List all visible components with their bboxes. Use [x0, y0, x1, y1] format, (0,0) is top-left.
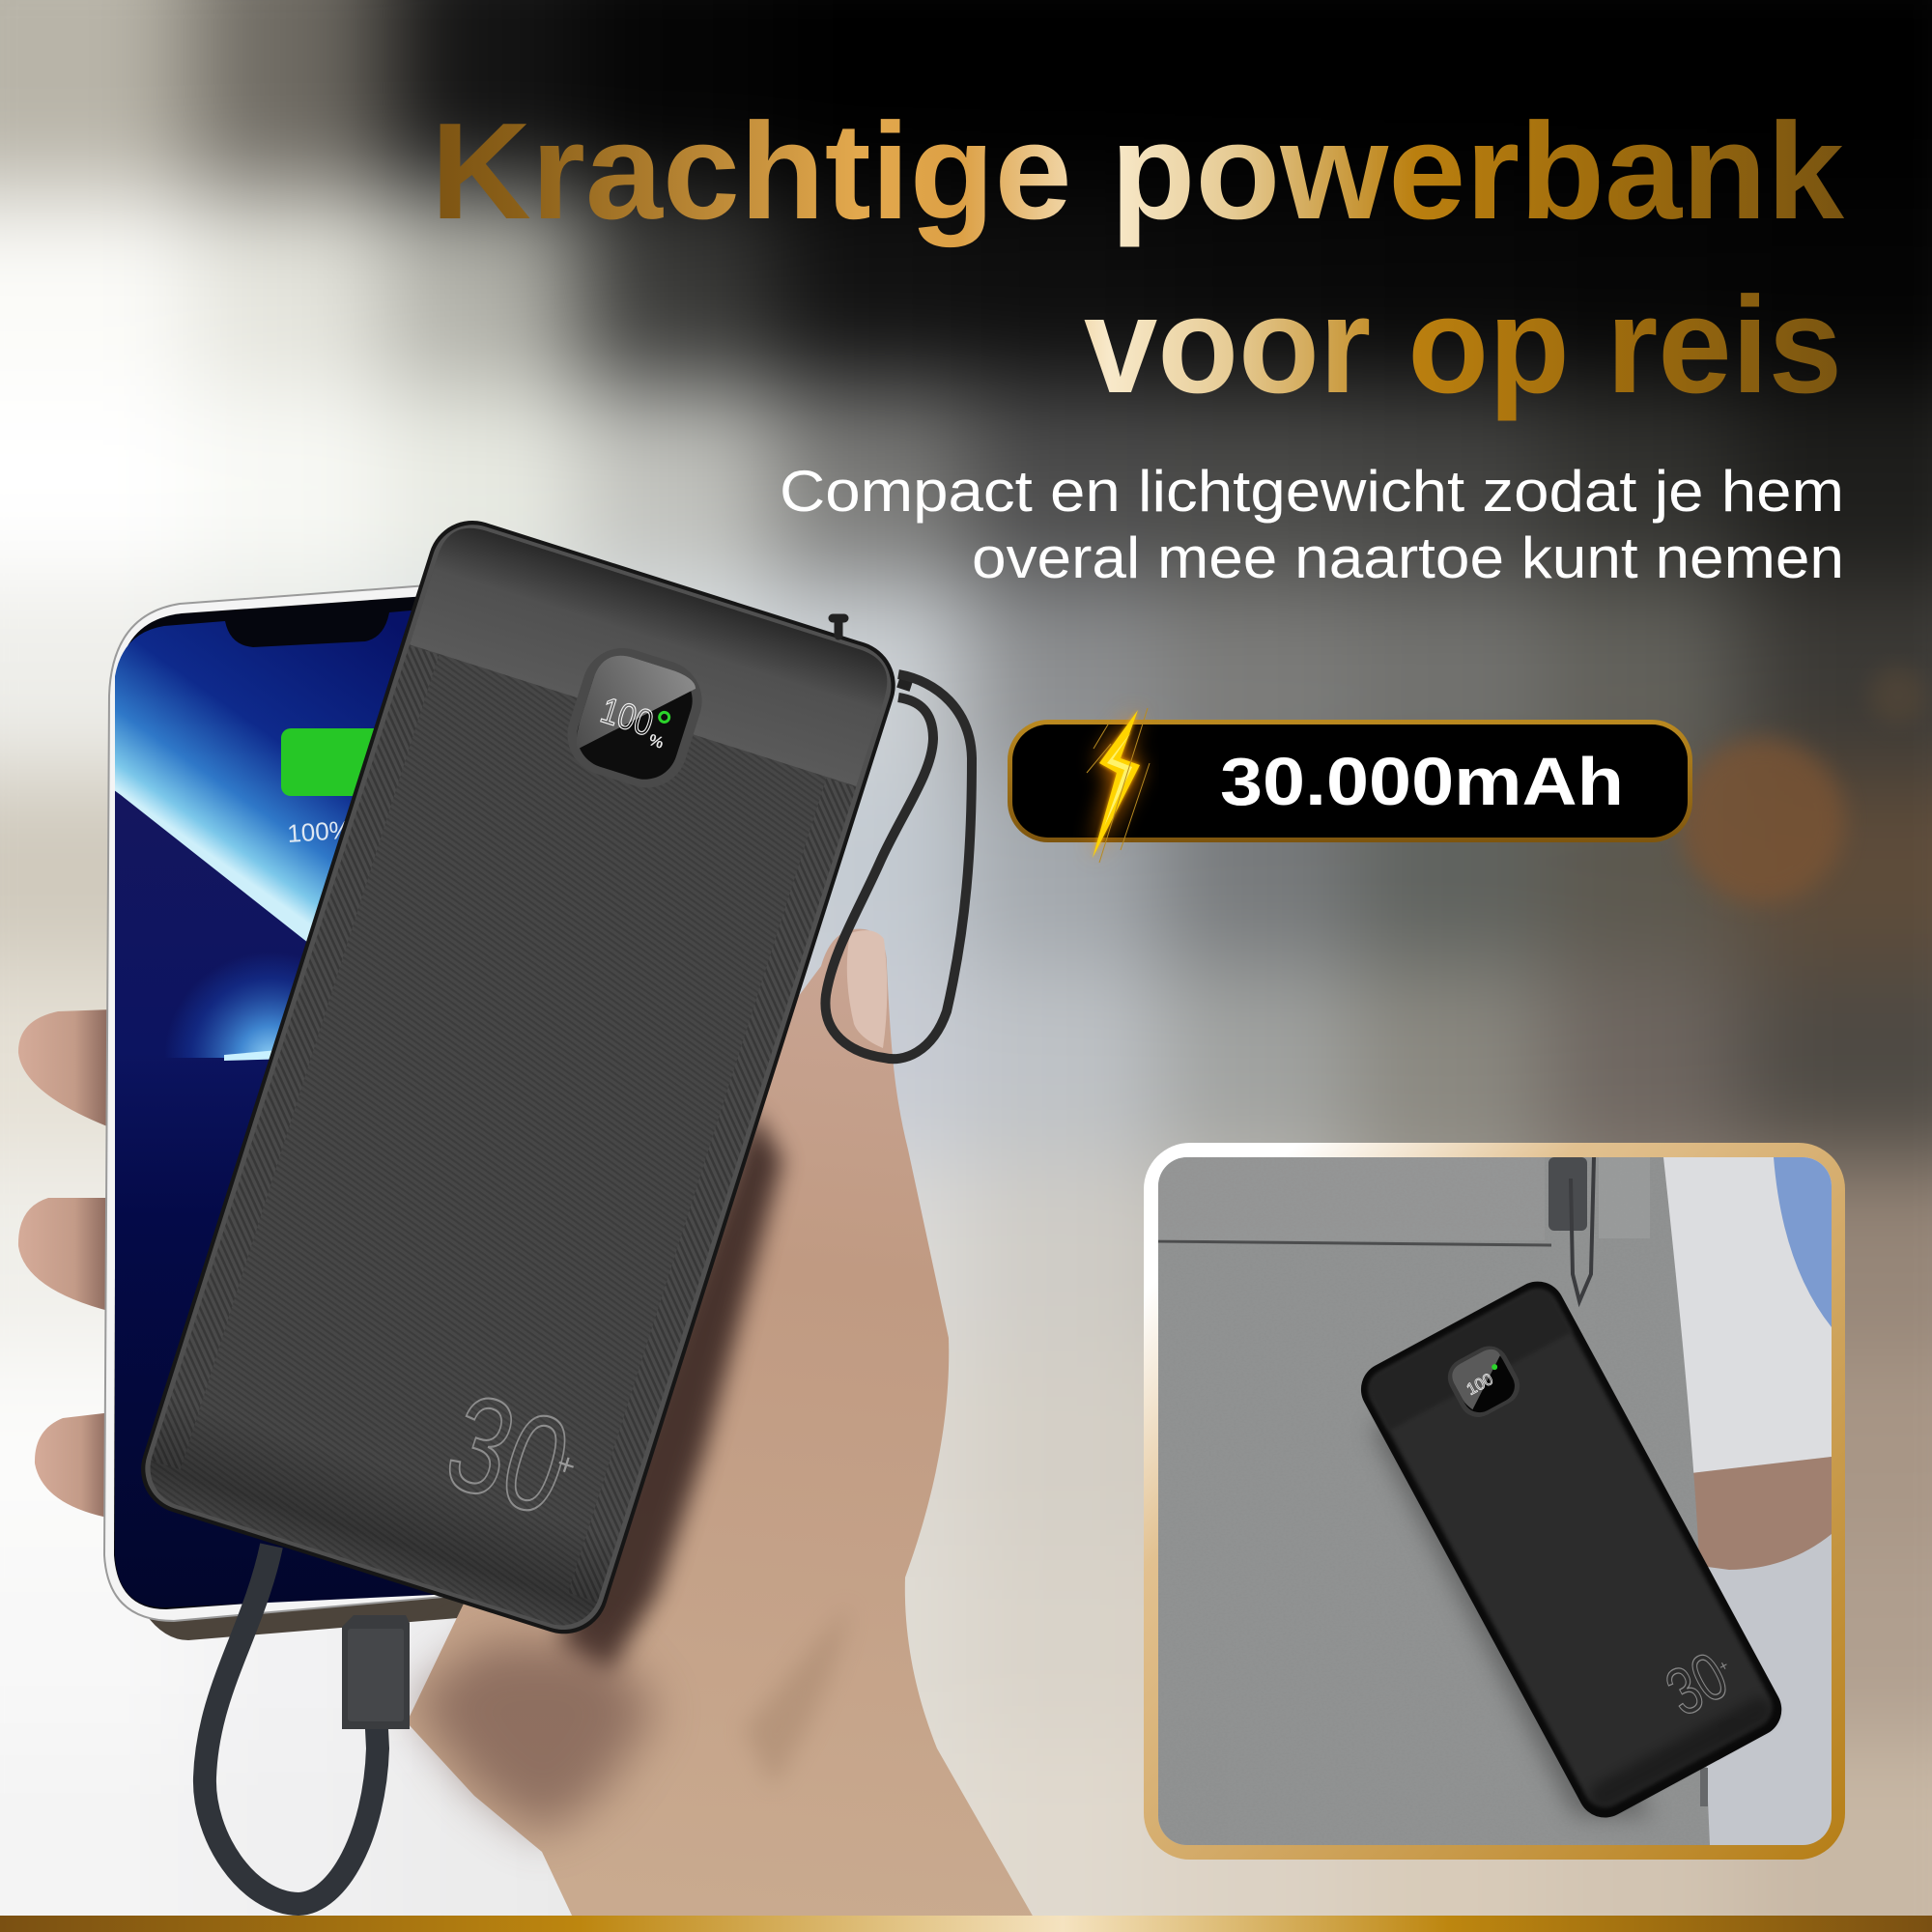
icon: lightning bolt [1087, 708, 1150, 863]
heading line 1: Krachtige powerbank [431, 95, 1845, 248]
battery label: 100% [286, 814, 353, 848]
mini 30+ logo: 30 [1654, 1637, 1740, 1730]
inset photo [1158, 1157, 1832, 1845]
lanyard cable [825, 674, 972, 1059]
side ribbing [151, 645, 856, 1602]
fabric texture [1158, 1157, 1719, 1845]
powerbank [129, 509, 907, 1645]
grey trousers [1158, 1157, 1710, 1845]
display [557, 638, 712, 798]
inset photo frame [1144, 1143, 1845, 1860]
capacity value: 30.000mAh [1220, 744, 1624, 819]
bag strap [1548, 1157, 1708, 1806]
percent sign: % [646, 730, 666, 753]
subtitle: Compact en lichtgewicht zodat je hem [780, 459, 1844, 524]
phone screen [115, 611, 435, 1607]
mini plus: + [1717, 1657, 1732, 1676]
mini display [1448, 1347, 1520, 1417]
heading [431, 95, 1845, 422]
forearm [1683, 1457, 1832, 1570]
charging LED [658, 711, 670, 724]
phone [104, 583, 493, 1642]
top pin [833, 618, 844, 636]
subtitle [780, 459, 1844, 590]
hand: fingers behind phone [18, 1009, 112, 1519]
subtitle: overal mee naartoe kunt nemen [972, 526, 1844, 590]
30+ logo: 30 [431, 1364, 586, 1545]
heading line 2: voor op reis [1084, 269, 1842, 422]
charging cable loop [205, 1546, 378, 1904]
mini display: 100 [1463, 1370, 1496, 1399]
hand: palm and thumb [407, 929, 1034, 1918]
white t-shirt [1662, 1157, 1832, 1474]
mini powerbank [1351, 1272, 1791, 1827]
battery icon [281, 728, 375, 796]
garment shadow [1372, 1391, 1652, 1816]
capacity badge [1008, 708, 1692, 863]
USB connector [342, 1615, 410, 1729]
plus sign: + [553, 1445, 581, 1484]
thumb nail [847, 930, 887, 1048]
smooth top panel [410, 520, 896, 786]
bottom gold band [0, 1916, 1932, 1932]
display readout: 100 [596, 691, 658, 745]
